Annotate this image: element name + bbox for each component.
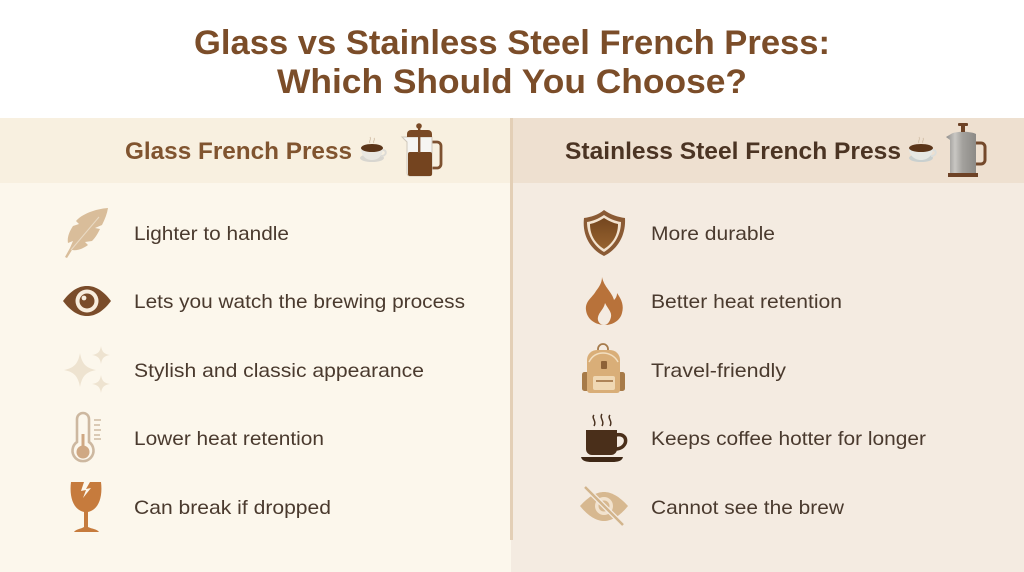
icon: feather (65, 208, 108, 258)
label: Stylish and classic appearance (134, 360, 424, 382)
steel panel header (511, 118, 1024, 183)
label: Better heat retention (651, 291, 842, 313)
row: better heat (586, 277, 842, 325)
icon: flame (586, 277, 623, 325)
row: lighter to handle (65, 208, 289, 258)
icon: shield (584, 210, 625, 256)
label: More durable (651, 223, 775, 245)
panel: glass french press (0, 118, 511, 572)
icon: crossed eye (580, 487, 628, 525)
row: stylish (64, 346, 424, 393)
icon: sparkles (64, 346, 110, 393)
icon: eye (63, 286, 111, 316)
icon: coffee cup (909, 137, 936, 162)
row: lower heat (73, 413, 324, 461)
row: keeps hotter (581, 414, 927, 462)
title: Glass vs Stainless Steel French Press: (194, 24, 830, 62)
row: more durable (584, 210, 775, 256)
label: Keeps coffee hotter for longer (651, 428, 927, 450)
icon: thermometer (73, 413, 101, 461)
icon: glass french press (402, 123, 441, 176)
row: cannot see (580, 487, 845, 525)
glass heading: Glass French Press (125, 138, 352, 165)
icon: broken glass (71, 482, 101, 532)
icon: coffee cup (360, 137, 386, 162)
icon: steaming coffee cup (581, 414, 626, 462)
label: Lets you watch the brewing process (134, 291, 465, 313)
title (194, 24, 830, 101)
row: can break (71, 482, 331, 532)
label: Can break if dropped (134, 497, 331, 519)
title: Which Should You Choose? (277, 63, 747, 101)
icon: backpack (582, 344, 625, 393)
label: Travel-friendly (651, 360, 786, 382)
icon: steel french press (946, 123, 985, 177)
row: travel (582, 344, 786, 393)
label: Cannot see the brew (651, 497, 845, 519)
label: Lower heat retention (134, 428, 324, 450)
steel heading: Stainless Steel French Press (565, 138, 901, 165)
glass panel header (0, 118, 511, 183)
label: Lighter to handle (134, 223, 289, 245)
row: watch brewing (63, 286, 465, 316)
panel: stainless steel french press (511, 118, 1024, 572)
